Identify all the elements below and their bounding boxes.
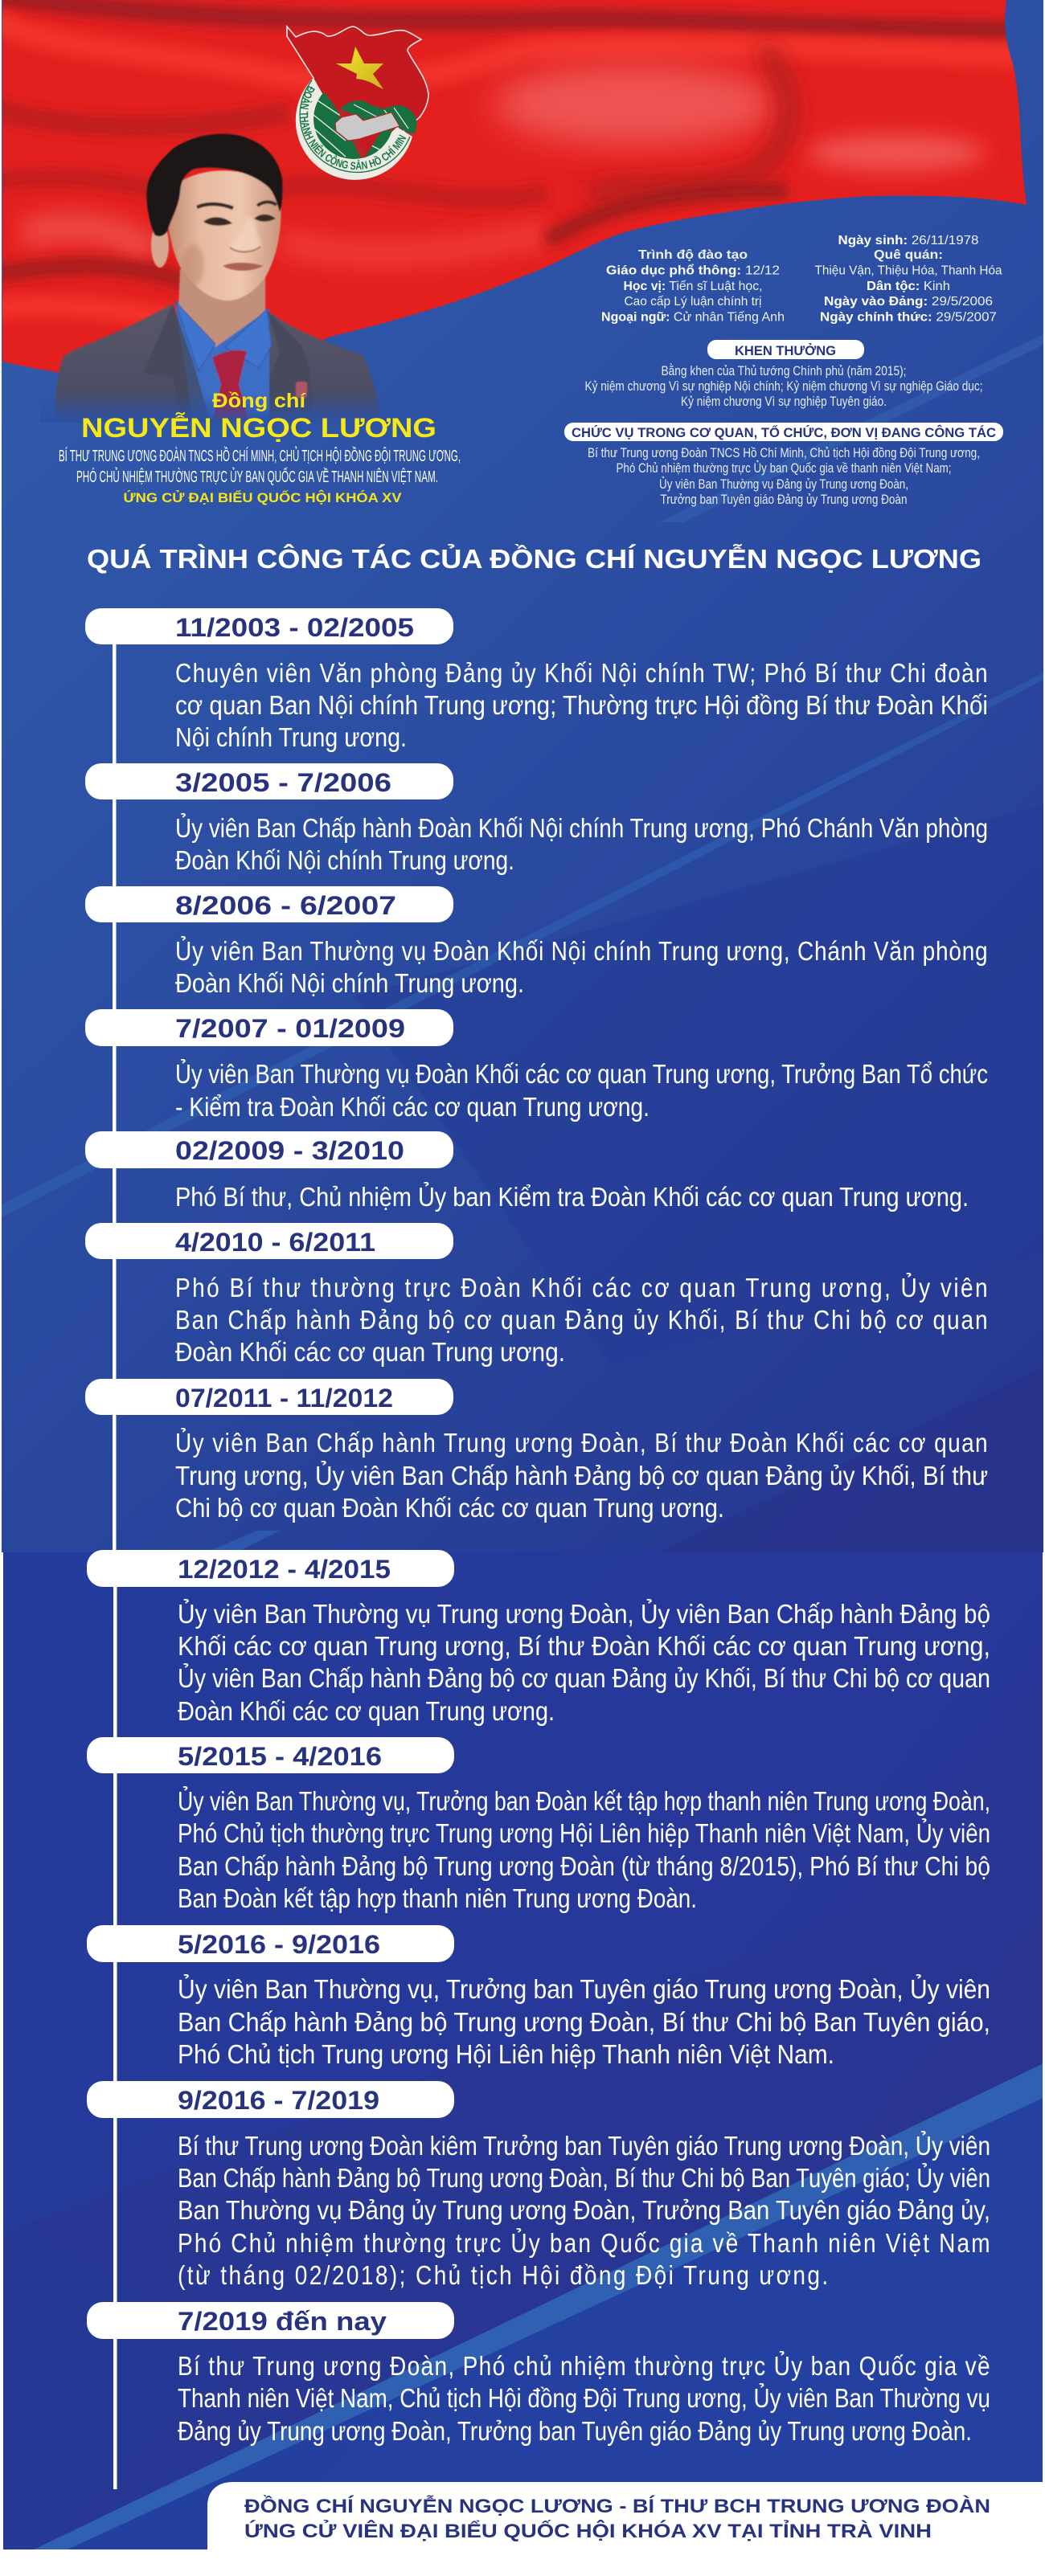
awards list: Kỷ niệm chương Vì sự nghiệp Tuyên giáo. xyxy=(681,394,887,409)
date pill xyxy=(85,1223,453,1259)
candidacy: ỨNG CỬ ĐẠI BIỂU QUỐC HỘI KHÓA XV xyxy=(124,489,402,505)
role lines xyxy=(59,446,461,486)
flag background xyxy=(0,0,1045,378)
section title: QUÁ TRÌNH CÔNG TÁC CỦA ĐỒNG CHÍ NGUYỄN NGỌC LƯƠNG xyxy=(87,543,981,574)
timeline entry 3 xyxy=(85,886,988,998)
timeline entry 2 xyxy=(85,763,988,875)
date pill: 4/2010 - 6/2011 xyxy=(175,1228,375,1257)
portrait photo xyxy=(40,134,402,423)
description: Chuyên viên Văn phòng Đảng ủy Khối Nội chính TW; Phó Bí thư Chi đoàn xyxy=(175,659,988,689)
description xyxy=(175,813,988,875)
inner green circle xyxy=(314,79,392,159)
date pill xyxy=(85,608,453,644)
date pill xyxy=(87,1737,454,1773)
timeline entry 11 xyxy=(87,2081,990,2291)
date pill: 07/2011 - 11/2012 xyxy=(175,1384,393,1413)
name block xyxy=(59,390,461,505)
education details: Ngoại ngữ: Cử nhân Tiếng Anh xyxy=(601,310,785,325)
date pill: 12/2012 - 4/2015 xyxy=(178,1555,391,1584)
timeline line xyxy=(113,635,117,2489)
description: Ban Chấp hành Đảng bộ cơ quan Đảng ủy Khối, Bí thư Chi bộ cơ quan xyxy=(175,1306,988,1335)
portrait figure xyxy=(55,134,382,422)
footer text xyxy=(244,2494,990,2542)
description: Phó Bí thư thường trực Đoàn Khối các cơ quan Trung ương, Ủy viên xyxy=(175,1272,988,1303)
description xyxy=(178,2350,990,2446)
personal details: Ngày sinh: 26/11/1978 xyxy=(838,234,979,247)
name: NGUYỄN NGỌC LƯƠNG xyxy=(81,413,436,444)
personal details: Ngày chính thức: 29/5/2007 xyxy=(820,310,997,325)
description: Ủy viên Ban Thường vụ, Trưởng ban Tuyên giáo Trung ương Đoàn, Ủy viên xyxy=(178,1974,990,2004)
description: Phó Chủ tịch Trung ương Hội Liên hiệp Thanh niên Việt Nam. xyxy=(178,2039,834,2069)
awards section xyxy=(585,340,982,409)
timeline entry 5 xyxy=(85,1131,969,1212)
greeting: Đồng chí xyxy=(212,390,306,412)
personal details xyxy=(815,234,1002,325)
description: Đoàn Khối các cơ quan Trung ương. xyxy=(178,1696,555,1726)
description xyxy=(175,1427,988,1523)
description: Đoàn Khối các cơ quan Trung ương. xyxy=(175,1337,565,1367)
description: Nội chính Trung ương. xyxy=(175,722,407,752)
personal details: Dân tộc: Kinh xyxy=(867,280,950,293)
current positions section xyxy=(564,423,1003,507)
flag pole xyxy=(338,109,366,158)
bottom fade xyxy=(40,392,402,423)
timeline entry 1 xyxy=(85,608,988,752)
description: Ủy viên Ban Thường vụ Đoàn Khối Nội chính Trung ương, Chánh Văn phòng xyxy=(175,935,988,967)
date pill: 7/2007 - 01/2009 xyxy=(175,1014,405,1043)
timeline entry 6 xyxy=(85,1223,988,1367)
timeline entry 7 xyxy=(85,1379,988,1523)
description: Chi bộ cơ quan Đoàn Khối các cơ quan Trung ương. xyxy=(175,1493,724,1523)
date pill xyxy=(85,1379,453,1415)
date pill xyxy=(87,1925,454,1962)
description: Đoàn Khối Nội chính Trung ương. xyxy=(175,968,524,998)
education details: Học vị: Tiến sĩ Luật học, xyxy=(624,280,762,293)
footer text: ỨNG CỬ VIÊN ĐẠI BIỂU QUỐC HỘI KHÓA XV TẠI TỈNH TRÀ VINH xyxy=(244,2519,932,2542)
description xyxy=(178,1786,990,1913)
date pill xyxy=(85,886,453,922)
education details: Cao cấp Lý luận chính trị xyxy=(624,295,762,309)
green sleeve xyxy=(340,100,417,133)
description xyxy=(178,2131,990,2291)
icon: youth union logo xyxy=(286,25,429,180)
description xyxy=(178,1599,990,1726)
timeline entry 8 xyxy=(87,1550,990,1726)
description: Khối các cơ quan Trung ương, Bí thư Đoàn Khối các cơ quan Trung ương, xyxy=(178,1631,990,1661)
date pill xyxy=(87,1550,454,1587)
date pill: 5/2015 - 4/2016 xyxy=(178,1742,382,1771)
date pill xyxy=(85,1009,453,1046)
description: Ban Chấp hành Đảng bộ Trung ương Đoàn, Bí thư Chi bộ Ban Tuyên giáo, xyxy=(178,2007,990,2037)
description xyxy=(175,659,988,752)
date pill: 7/2019 đến nay xyxy=(178,2307,387,2336)
date pill xyxy=(85,763,453,799)
date pill: 8/2006 - 6/2007 xyxy=(175,891,396,920)
awards list: Bằng khen của Thủ tướng Chính phủ (năm 2015); xyxy=(661,363,907,378)
hand xyxy=(335,112,400,141)
date pill: 5/2016 - 9/2016 xyxy=(178,1930,380,1959)
education details xyxy=(601,248,785,325)
description: Bí thư Trung ương Đoàn, Phó chủ nhiệm thường trực Ủy ban Quốc gia về xyxy=(178,2350,990,2382)
date pill: 3/2005 - 7/2006 xyxy=(175,768,391,797)
positions heading pill: CHỨC VỤ TRONG CƠ QUAN, TỔ CHỨC, ĐƠN VỊ ĐANG CÔNG TÁC xyxy=(572,425,996,440)
personal details: Ngày vào Đảng: 29/5/2006 xyxy=(824,295,993,309)
date pill: 02/2009 - 3/2010 xyxy=(175,1136,404,1165)
awards list xyxy=(585,363,982,409)
positions list xyxy=(588,445,980,507)
timeline entry 10 xyxy=(87,1925,990,2069)
role lines: BÍ THƯ TRUNG ƯƠNG ĐOÀN TNCS HỒ CHÍ MINH, CHỦ TỊCH HỘI ĐỒNG ĐỘI TRUNG ƯƠNG, xyxy=(59,446,461,465)
description: Phó Chủ nhiệm thường trực Ủy ban Quốc gia về Thanh niên Việt Nam xyxy=(178,2227,990,2259)
description: - Kiểm tra Đoàn Khối các cơ quan Trung ương. xyxy=(175,1092,650,1122)
date pill: 11/2003 - 02/2005 xyxy=(175,613,414,642)
positions list: Phó Chủ nhiệm thường trực Ủy ban Quốc gia về thanh niên Việt Nam; xyxy=(616,460,952,476)
footer text: ĐỒNG CHÍ NGUYỄN NGỌC LƯƠNG - BÍ THƯ BCH TRUNG ƯƠNG ĐOÀN xyxy=(244,2494,990,2517)
description xyxy=(175,935,988,998)
awards heading pill xyxy=(707,340,864,359)
personal details: Quê quán: xyxy=(874,248,943,262)
positions list: Trưởng ban Tuyên giáo Đảng ủy Trung ương Đoàn xyxy=(661,492,907,507)
positions list: Ủy viên Ban Thường vụ Đảng ủy Trung ương Đoàn, xyxy=(659,476,908,492)
date pill: 9/2016 - 7/2019 xyxy=(178,2086,379,2115)
personal details: Thiệu Vận, Thiệu Hóa, Thanh Hóa xyxy=(815,264,1002,278)
description: Đoàn Khối Nội chính Trung ương. xyxy=(175,845,514,875)
star xyxy=(336,47,383,90)
date pill xyxy=(85,1131,453,1168)
timeline entry 4 xyxy=(85,1009,988,1122)
awards heading pill: KHEN THƯỞNG xyxy=(735,343,836,358)
footer panel xyxy=(207,2482,1043,2549)
description xyxy=(178,1974,990,2069)
description: (từ tháng 02/2018); Chủ tịch Hội đồng Đội Trung ương. xyxy=(178,2261,828,2291)
timeline entry 12 xyxy=(87,2302,990,2446)
timeline entry 9 xyxy=(87,1737,990,1913)
description: Ban Đoàn kết tập hợp thanh niên Trung ương Đoàn. xyxy=(178,1883,697,1913)
description xyxy=(175,1272,988,1367)
education details: Trình độ đào tạo xyxy=(638,248,748,262)
education details: Giáo dục phổ thông: 12/12 xyxy=(606,264,780,278)
date pill xyxy=(87,2302,454,2339)
emblem ring xyxy=(296,78,412,180)
description xyxy=(175,1059,988,1122)
description: Ủy viên Ban Chấp hành Trung ương Đoàn, Bí thư Đoàn Khối các cơ quan xyxy=(175,1427,988,1458)
date pill xyxy=(87,2081,454,2118)
role lines: PHÓ CHỦ NHIỆM THƯỜNG TRỰC ỦY BAN QUỐC GIA VỀ THANH NIÊN VIỆT NAM. xyxy=(76,467,438,486)
